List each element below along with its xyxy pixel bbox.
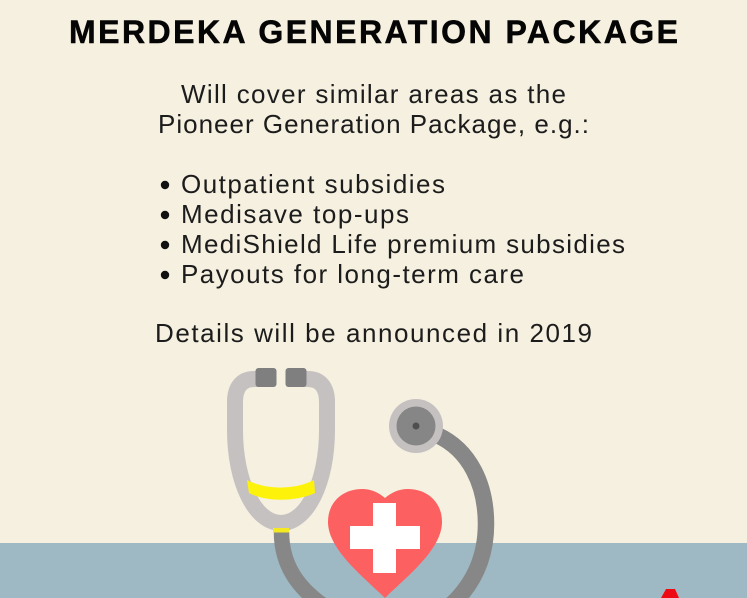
intro text: Pioneer Generation Package, e.g.: <box>158 109 589 139</box>
white cross <box>350 503 420 573</box>
intro text <box>158 79 589 139</box>
right earpiece <box>286 368 306 387</box>
title: MERDEKA GENERATION PACKAGE <box>69 14 678 50</box>
icon: stethoscope <box>235 368 486 598</box>
bullet list: Outpatient subsidies <box>181 169 445 199</box>
chest piece <box>389 399 443 453</box>
yellow band <box>247 480 315 500</box>
intro text: Will cover similar areas as the <box>181 79 566 109</box>
icon: red shape at bottom edge <box>661 589 679 598</box>
left earpiece <box>256 368 276 387</box>
floor band <box>0 543 747 598</box>
yellow collar <box>273 528 289 532</box>
details note: Details will be announced in 2019 <box>155 318 592 348</box>
stethoscope lower tube <box>282 532 324 598</box>
icon: heart with cross <box>328 489 442 598</box>
bullet list <box>161 169 625 289</box>
stethoscope headset <box>235 379 327 523</box>
bullet list: MediShield Life premium subsidies <box>181 229 625 259</box>
bullet list: Payouts for long-term care <box>181 259 524 289</box>
bullet list: Medisave top-ups <box>181 199 409 229</box>
stethoscope chest tube <box>437 435 486 598</box>
